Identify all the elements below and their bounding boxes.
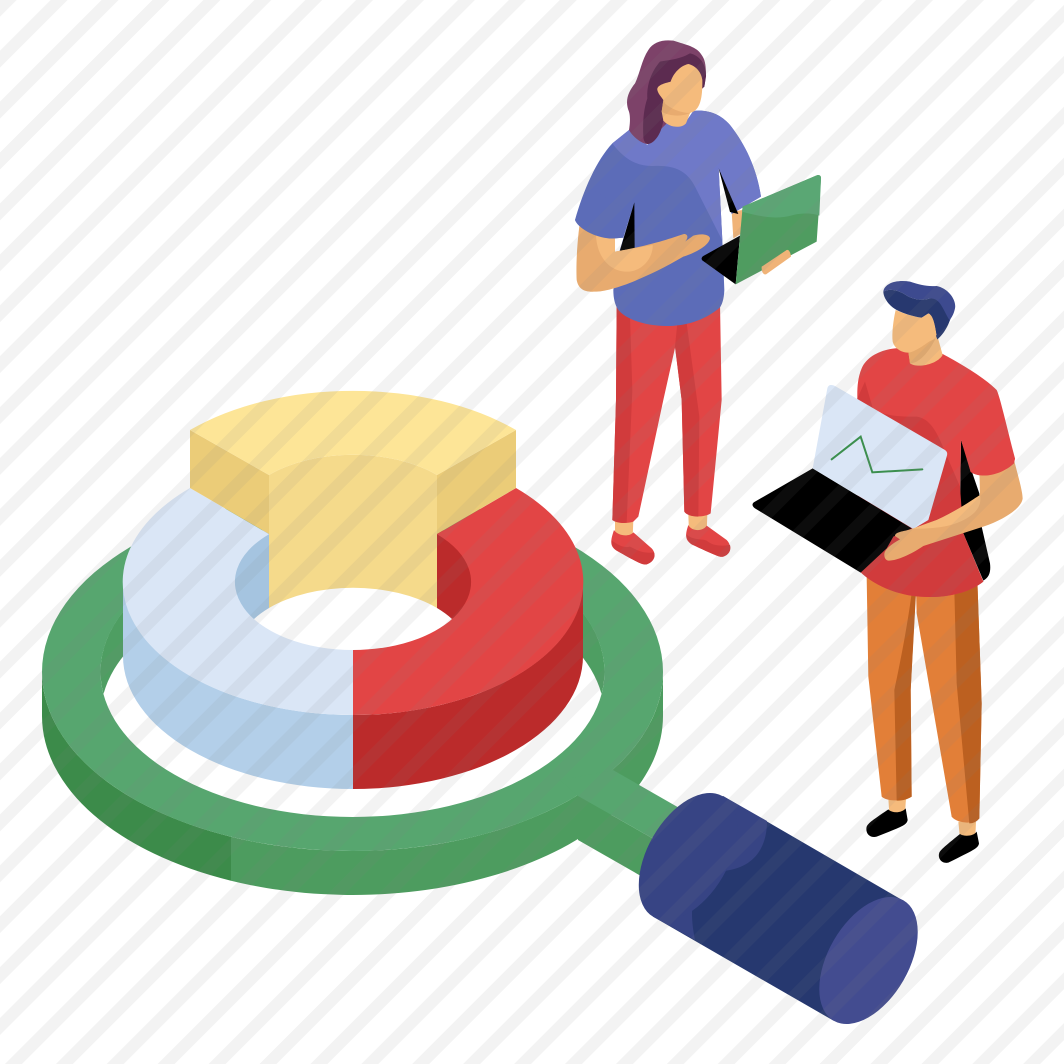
- laptop screen: [736, 175, 821, 284]
- man arm highlight: [912, 495, 980, 529]
- donut chart: [123, 391, 583, 789]
- left ankle and shoe: [611, 520, 655, 564]
- left trouser shade: [612, 303, 632, 523]
- black inner sleeve right: [719, 168, 738, 214]
- right trouser leg: [916, 580, 982, 823]
- ring top face: [42, 493, 663, 851]
- laptop screen: [813, 385, 947, 529]
- face: [657, 64, 702, 113]
- black inner sleeve left: [619, 202, 635, 253]
- grip far end cap: [799, 880, 938, 1041]
- right trouser shade: [675, 323, 699, 517]
- shirt: [575, 111, 761, 326]
- right trouser leg: [675, 303, 722, 516]
- right shoe: [939, 832, 979, 863]
- left sleeve hem: [575, 190, 627, 239]
- right trouser shade: [954, 580, 982, 823]
- right sleeve hem: [967, 437, 1015, 476]
- laptop keyboard: [752, 468, 912, 573]
- neck shadow: [662, 101, 693, 116]
- grip near end: [618, 776, 758, 937]
- left trouser leg: [867, 577, 916, 800]
- shirt shade: [857, 382, 983, 597]
- neck: [908, 333, 943, 366]
- yellow raised segment: [190, 391, 516, 608]
- magnifying glass: [42, 493, 938, 1041]
- handle neck top: [560, 770, 695, 838]
- blue segment top: [123, 488, 353, 715]
- handle neck side: [578, 796, 655, 884]
- shirt: [857, 347, 1015, 597]
- hair back: [930, 303, 953, 339]
- arm highlight: [596, 230, 653, 272]
- left trouser shade: [894, 593, 916, 801]
- red segment top: [353, 488, 583, 715]
- handle grip: [618, 776, 938, 1041]
- left shoe: [866, 808, 908, 837]
- black inner sleeve: [960, 440, 990, 581]
- man legs: [866, 577, 982, 863]
- laptop chart line: [832, 437, 922, 472]
- left arm: [576, 217, 710, 292]
- red segment side: [353, 582, 583, 789]
- right ankle: [958, 822, 976, 838]
- face: [892, 310, 937, 353]
- left ankle: [888, 798, 906, 814]
- hair back: [627, 40, 706, 144]
- ring inner wall: [101, 527, 604, 694]
- laptop keyboard: [702, 236, 740, 284]
- red inner wall: [437, 525, 481, 619]
- man upper body: [752, 281, 1023, 597]
- blue segment side: [123, 582, 353, 789]
- hair top: [883, 281, 955, 323]
- hair front: [643, 53, 706, 144]
- laptop screen highlight: [742, 175, 821, 217]
- right forearm: [732, 210, 743, 238]
- ring side right: [231, 672, 663, 895]
- right ankle and shoe: [686, 515, 730, 557]
- left trouser leg: [612, 303, 682, 523]
- neck: [662, 100, 691, 127]
- shirt highlight: [612, 111, 761, 241]
- hair dark: [883, 290, 949, 339]
- neck shadow: [908, 338, 936, 363]
- man arm: [884, 460, 1023, 561]
- blue inner wall: [225, 525, 269, 619]
- woman upper body: [575, 40, 821, 326]
- woman thumb: [762, 250, 791, 274]
- woman legs: [611, 303, 730, 564]
- grip light band: [653, 796, 767, 940]
- ring side left: [42, 672, 231, 881]
